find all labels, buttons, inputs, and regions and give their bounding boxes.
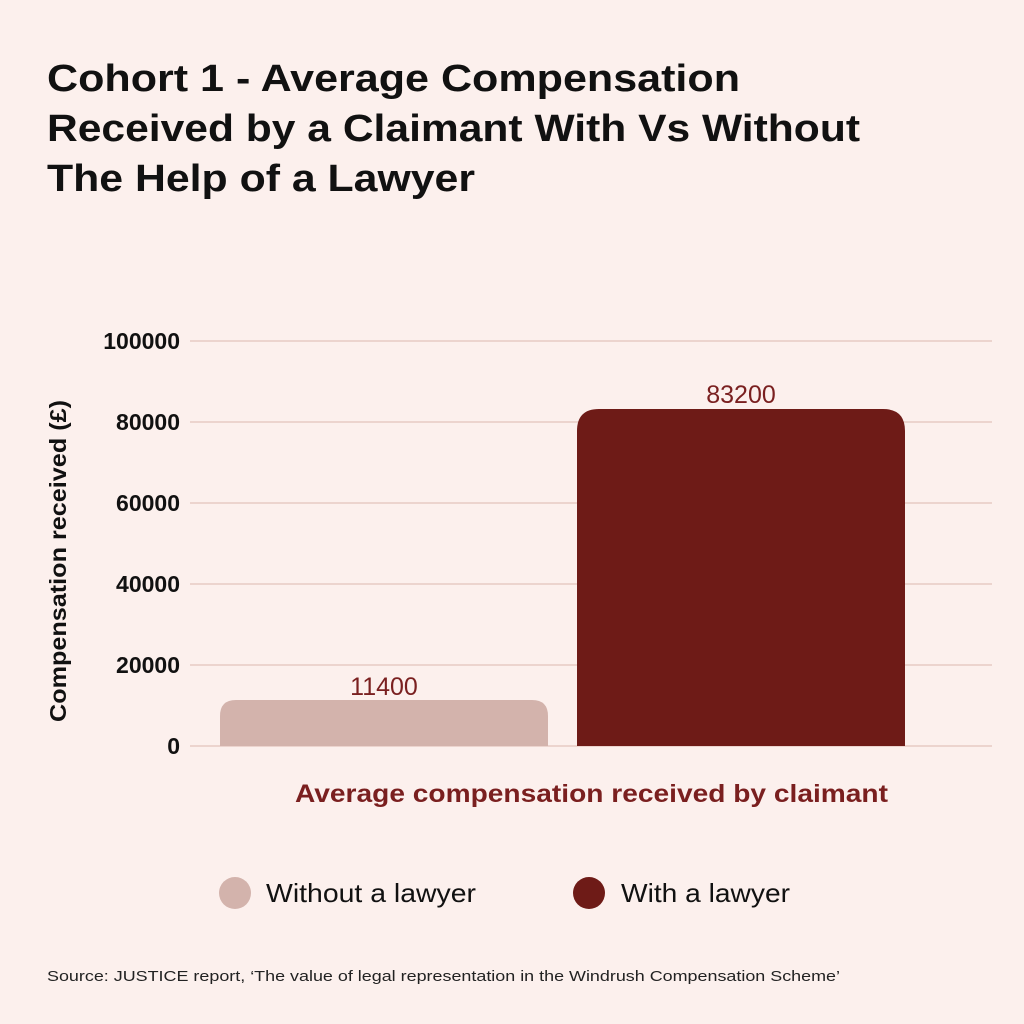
y-axis ticks: 60000 xyxy=(116,490,180,516)
title: Cohort 1 - Average Compensation xyxy=(47,58,740,100)
y-axis ticks: 80000 xyxy=(116,409,180,435)
title: Received by a Claimant With Vs Without xyxy=(47,108,860,150)
y-axis ticks: 100000 xyxy=(103,328,180,354)
y-axis ticks: 40000 xyxy=(116,571,180,597)
y-axis ticks xyxy=(103,328,180,759)
y-axis ticks: 20000 xyxy=(116,652,180,678)
title xyxy=(47,58,860,200)
y-axis ticks: 0 xyxy=(167,733,180,759)
source: Source: JUSTICE report, ‘The value of legal representation in the Windrush Compensation Scheme’ xyxy=(47,968,840,985)
legend xyxy=(219,877,790,909)
bar: with a lawyer: 83200 xyxy=(706,381,776,409)
y-axis title: Compensation received (£) xyxy=(45,400,71,722)
title: The Help of a Lawyer xyxy=(47,158,475,200)
legend: Without a lawyer xyxy=(266,878,476,908)
bar: without a lawyer xyxy=(220,673,548,746)
bar: without a lawyer: 11400 xyxy=(350,673,418,701)
legend: With a lawyer xyxy=(621,878,790,908)
bar: with a lawyer xyxy=(577,381,905,746)
x-axis title: Average compensation received by claimant xyxy=(295,780,889,808)
